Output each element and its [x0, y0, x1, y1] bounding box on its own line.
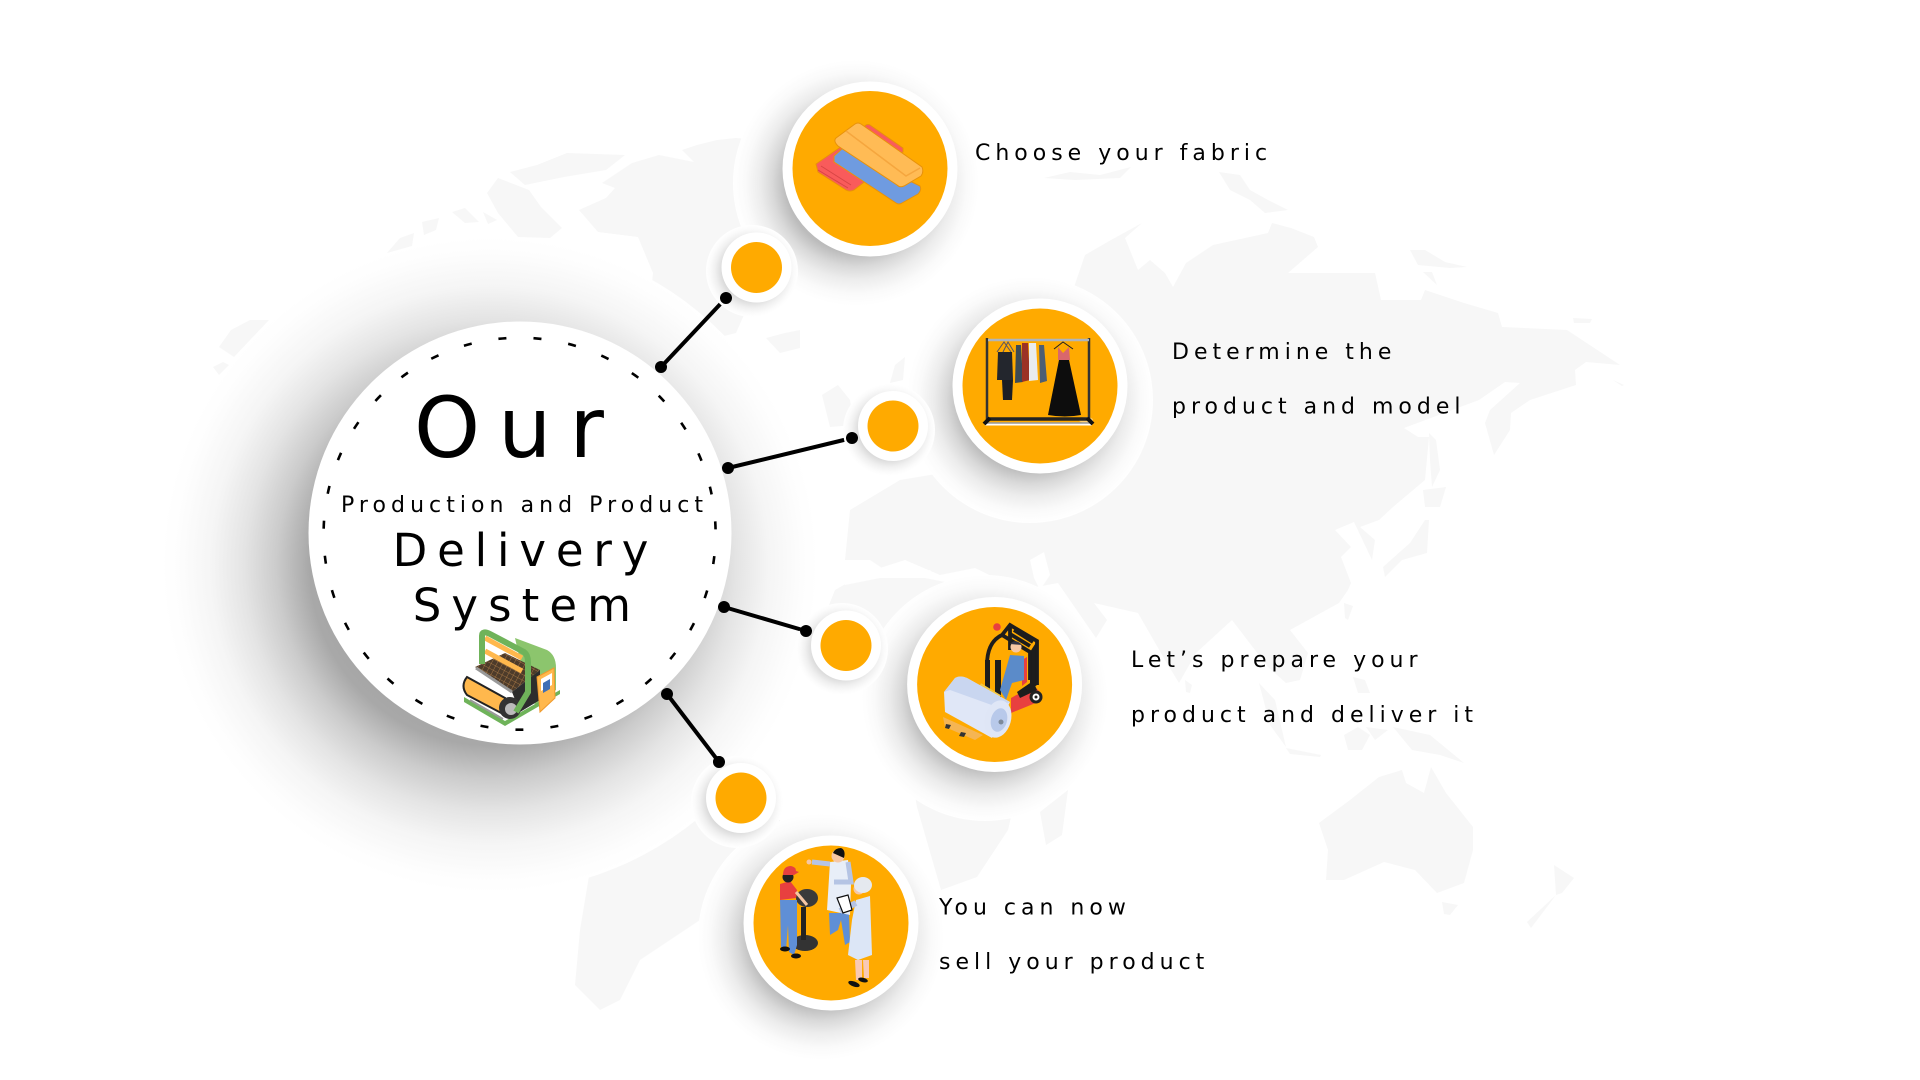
title: System: System	[413, 579, 641, 632]
step 4 label: You can now	[938, 896, 1131, 920]
connector end dots	[655, 292, 858, 768]
step 4 label: sell your product	[939, 950, 1209, 975]
world map background	[213, 138, 1624, 1010]
step 4 dot	[691, 756, 783, 848]
step 4: sell product	[698, 814, 944, 1060]
step 3: prepare and deliver	[862, 575, 1108, 821]
step 2 dot	[843, 384, 935, 476]
main circle	[308, 322, 732, 744]
step 2 label: product and model	[1172, 394, 1466, 420]
step 2 label	[1172, 340, 1466, 420]
icon: loom machine	[464, 632, 560, 726]
step 1 label: Choose your fabric	[975, 141, 1272, 166]
icon: fabric rolls	[816, 123, 923, 204]
step 3 label	[1131, 648, 1478, 728]
icon: people around a table	[780, 848, 872, 988]
dashed inner ring	[324, 338, 716, 730]
step 1: choose fabric	[733, 60, 979, 306]
connector lines	[661, 298, 852, 762]
icon: clothes rack	[984, 338, 1093, 424]
subtitle: Production and Product: Production and Product	[341, 493, 708, 518]
step 3 label: Let’s prepare your	[1131, 648, 1423, 673]
step 3 dot	[796, 603, 888, 695]
step 1 dot	[706, 225, 798, 317]
title: Our: Our	[414, 379, 622, 477]
step 2: product and model	[907, 277, 1153, 523]
icon: forklift with roll	[943, 623, 1042, 741]
title: Delivery: Delivery	[393, 524, 658, 577]
main circle halo and shadow	[162, 237, 818, 893]
step 2 label: Determine the	[1172, 340, 1396, 365]
step 3 label: product and deliver it	[1131, 703, 1478, 728]
step 4 label	[938, 896, 1209, 975]
